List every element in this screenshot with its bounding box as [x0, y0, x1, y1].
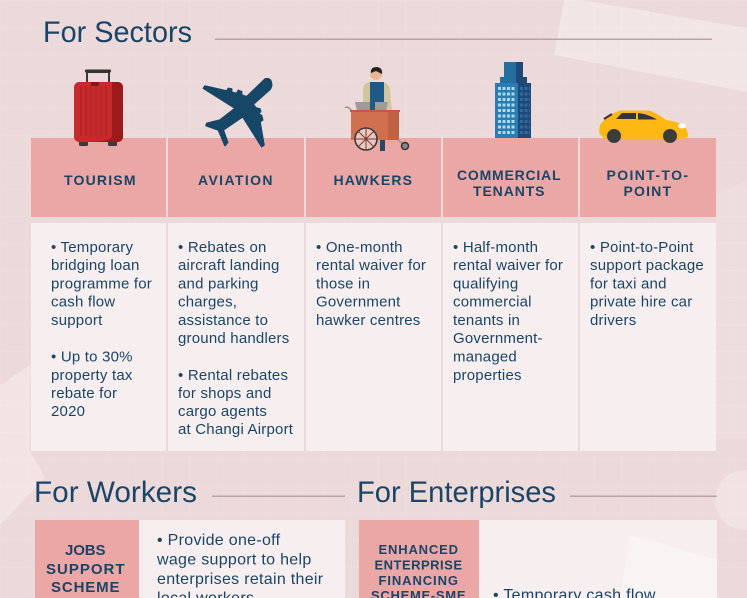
panel: aviation details: assistance to: [178, 312, 268, 329]
panel: commercial tenants details: managed: [453, 348, 517, 366]
panel: aviation details: aircraft landing: [178, 257, 280, 274]
panel: point-to-point details: [580, 223, 716, 451]
panel: aviation details: at Changi Airport: [178, 421, 294, 438]
header: point-to-point: POINT: [624, 183, 672, 199]
panel: jobs support scheme: SUPPORT: [46, 561, 126, 578]
panel: aviation details: • Rebates on: [178, 239, 267, 256]
panel: hawkers details: rental waiver for: [316, 257, 426, 274]
panel: commercial tenants details: rental waiver for: [453, 257, 563, 274]
panel: commercial tenants details: properties: [453, 367, 522, 384]
panel: enhanced enterprise financing scheme: ENTERPRISE: [374, 558, 464, 572]
panel: enhanced enterprise financing scheme: FINANCING: [378, 573, 460, 588]
icon: red suitcase: [74, 70, 123, 146]
header: hawkers: [306, 138, 441, 217]
header: commercial tenants: [443, 138, 578, 217]
panel: tourism details: programme for: [51, 276, 152, 292]
panel: hawkers details: • One-month: [316, 239, 403, 256]
panel: aviation details: ground handlers: [178, 330, 289, 347]
icon: yellow car: [599, 110, 688, 143]
panel: point-to-point details: • Point-to-Point: [590, 239, 694, 256]
panel: tourism details: • Up to 30%: [51, 348, 133, 366]
heading: For Enterprises: For Enterprises: [357, 476, 556, 509]
panel: jobs support scheme: • Provide one-off: [157, 532, 281, 549]
panel: sector header cards: [31, 138, 716, 217]
icon: hawker with cart: [345, 67, 408, 151]
panel: commercial tenants details: [443, 223, 578, 451]
panel: point-to-point details: for taxi and: [590, 276, 667, 292]
panel: tourism details: property tax: [51, 367, 133, 384]
panel: tourism details: support: [51, 312, 103, 329]
panel: commercial tenants details: Government-: [453, 330, 543, 347]
panel: point-to-point details: support package: [590, 257, 704, 274]
header: hawkers: HAWKERS: [334, 172, 414, 188]
panel: point-to-point details: drivers: [590, 312, 636, 329]
panel: tourism details: [31, 223, 166, 451]
panel: commercial tenants details: qualifying: [453, 276, 518, 292]
heading: For Sectors: For Sectors: [43, 16, 192, 49]
header: aviation: [168, 138, 304, 217]
heading: For Workers: For Workers: [34, 476, 197, 509]
panel: point-to-point details: private hire car: [590, 294, 692, 310]
header: commercial tenants: TENANTS: [473, 183, 546, 199]
header: commercial tenants: COMMERCIAL: [457, 167, 562, 183]
icon: office tower: [495, 62, 531, 138]
panel: tourism details: bridging loan: [51, 257, 140, 274]
panel: tourism details: • Temporary: [51, 239, 134, 256]
panel: jobs support scheme: wage support to help: [156, 552, 312, 568]
panel: aviation details: cargo agents: [178, 403, 267, 420]
panel: tourism details: rebate for: [51, 385, 117, 402]
panel: aviation details: and parking: [178, 276, 259, 292]
panel: aviation details: for shops and: [178, 385, 272, 402]
header: aviation: AVIATION: [198, 172, 274, 188]
panel: hawkers details: those in: [316, 276, 370, 292]
panel: jobs support scheme: enterprises retain their: [157, 571, 324, 588]
panel: hawkers details: Government: [316, 294, 401, 310]
panel: aviation details: charges,: [178, 294, 237, 310]
panel: hawkers details: [306, 223, 441, 451]
panel: commercial tenants details: • Half-month: [453, 239, 538, 256]
panel: jobs support scheme: SCHEME: [51, 579, 121, 596]
panel: tourism details: cash flow: [51, 294, 115, 310]
header: point-to-point: [580, 138, 716, 217]
panel: jobs support scheme: JOBS: [65, 542, 107, 559]
header: tourism: TOURISM: [64, 172, 137, 188]
header: tourism: [31, 138, 166, 217]
panel: commercial tenants details: commercial: [453, 294, 532, 310]
panel: hawkers details: hawker centres: [316, 312, 421, 329]
panel: commercial tenants details: tenants in: [453, 312, 520, 329]
panel: enhanced enterprise financing scheme: ENHANCED: [378, 542, 460, 557]
icon: airplane: [203, 79, 272, 147]
panel: aviation details: [168, 223, 304, 451]
header: point-to-point: POINT-TO-: [606, 167, 690, 183]
panel: jobs support scheme: [35, 520, 345, 598]
panel: aviation details: • Rental rebates: [178, 367, 288, 384]
panel: tourism details: 2020: [51, 403, 85, 420]
panel: enhanced enterprise financing scheme: [359, 520, 717, 598]
